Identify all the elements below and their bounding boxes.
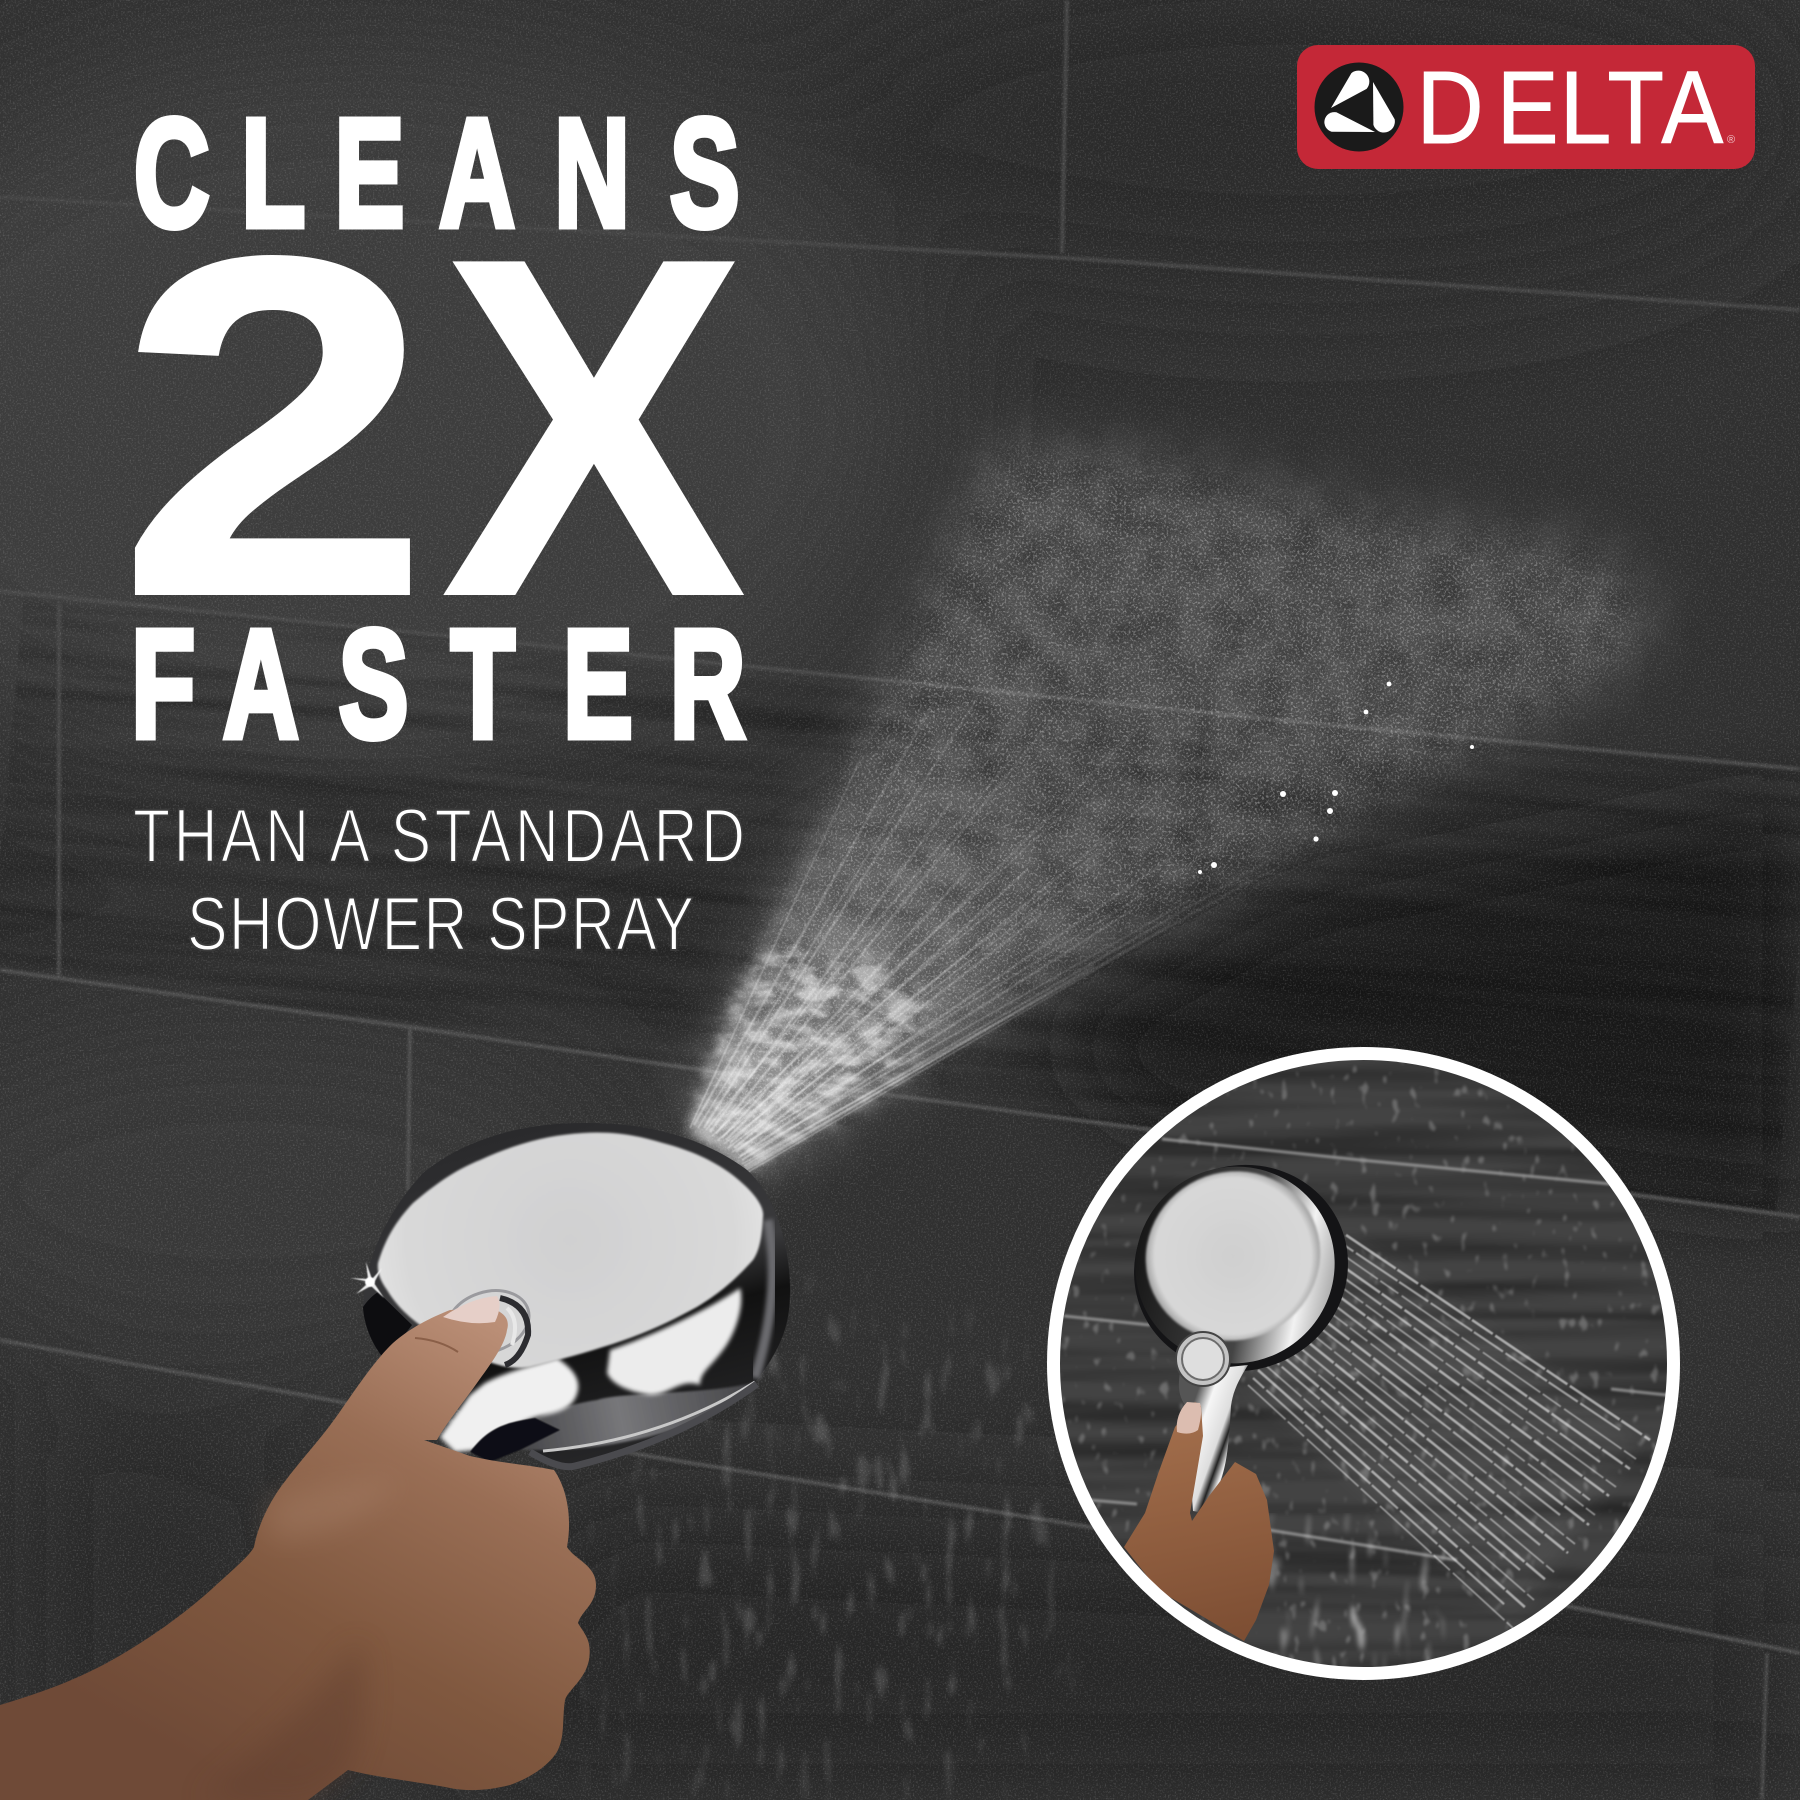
sparkle (350, 1262, 384, 1298)
bottom rim highlight (543, 1382, 755, 1451)
logo mark (1314, 62, 1404, 152)
left black reflection (363, 1292, 412, 1360)
knuckle highlight (270, 1480, 400, 1540)
inset grout lines (1064, 1139, 1667, 1560)
inset button (1176, 1332, 1230, 1386)
inset scene (1050, 1050, 1680, 1680)
spray haze (1260, 1248, 1625, 1604)
spray mist cloud (690, 440, 1670, 1171)
logo wordmark: DELTA (1417, 49, 1724, 165)
inset hand (1124, 1402, 1274, 1641)
inset water marks (1270, 1520, 1440, 1660)
inset spray jets (1248, 1235, 1650, 1628)
spray droplet speckle (700, 450, 1650, 1161)
main hand shower head (350, 1123, 790, 1467)
water spray from main shower head (686, 440, 1670, 1172)
chrome reflection: right blob (607, 1288, 741, 1395)
Delta logo (1297, 45, 1755, 169)
arm and hand (0, 1308, 596, 1800)
dark reflection under neck (470, 1418, 560, 1462)
inset background (1050, 1050, 1680, 1680)
inset water spots (1050, 1050, 1680, 1680)
radial water streaks (690, 700, 1352, 1172)
knuckle crease (415, 1338, 458, 1352)
chrome reflection: grey lower bowl (490, 1383, 753, 1450)
bright water droplets (1198, 682, 1474, 874)
hand pressing button (0, 1296, 596, 1800)
headline: CLEANS: CLEANS (134, 87, 740, 259)
inset white ring (1054, 1054, 1674, 1674)
chrome body and dark rim (363, 1123, 790, 1467)
lower rim band (530, 1384, 757, 1467)
spray cone body (686, 640, 1250, 1172)
inset handle (1179, 1365, 1248, 1513)
bright water jets near nozzle (692, 940, 930, 1170)
inset shower head (1100, 1130, 1382, 1406)
push button ring (439, 1280, 537, 1365)
headline (116, 87, 749, 967)
registered mark: ® (1727, 134, 1735, 146)
logo red badge (1297, 45, 1755, 169)
headline: X: X (441, 157, 749, 697)
fingernail (443, 1296, 500, 1323)
subhead: THAN A STANDARD: THAN A STANDARD (133, 794, 745, 879)
chrome reflection: handle neck (440, 1358, 578, 1452)
water marks on lower wall (600, 1260, 1060, 1780)
inset fingernail (1177, 1402, 1201, 1434)
headline: FASTER: FASTER (131, 598, 745, 770)
wrist shadow (200, 1640, 365, 1800)
headline: 2: 2 (116, 156, 431, 697)
dark right wall band (1050, 800, 1800, 1210)
subhead: SHOWER SPRAY: SHOWER SPRAY (187, 882, 694, 967)
inset circle: standard shower spray comparison (1050, 1050, 1680, 1680)
white spray face (378, 1133, 763, 1368)
right chrome edge (755, 1220, 773, 1378)
